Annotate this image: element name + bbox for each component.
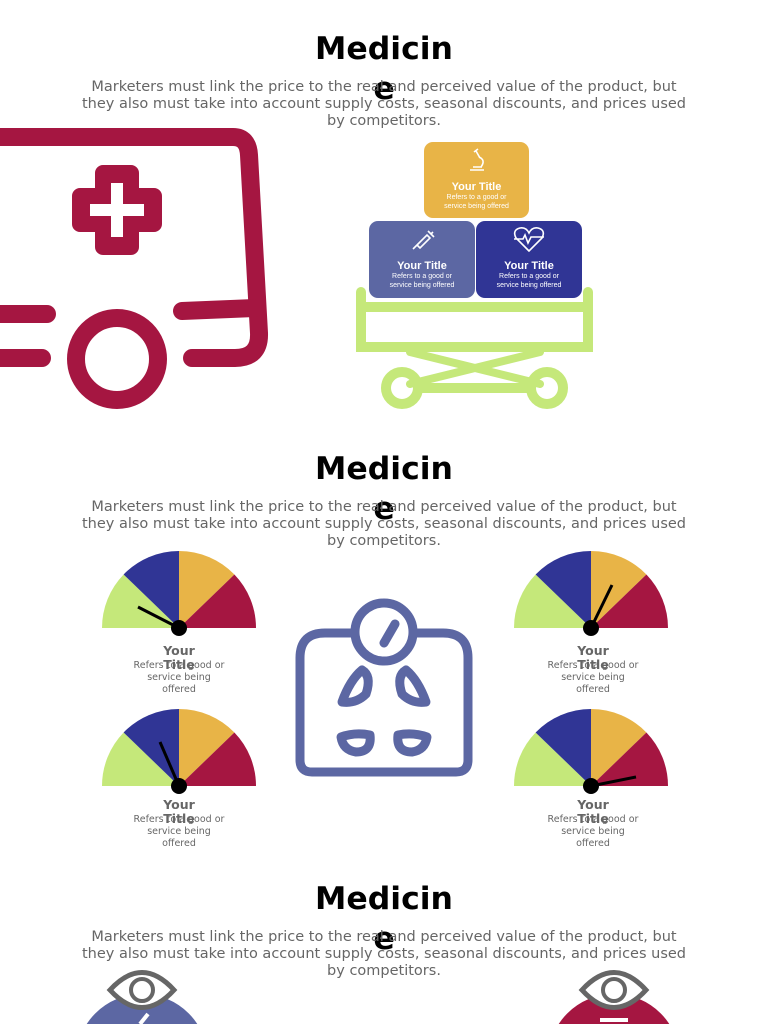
- gauge label 1: [134, 643, 224, 695]
- gauge label 2: [548, 643, 638, 695]
- title 1: [315, 31, 453, 107]
- paragraph 1: Marketers must link the price to the real and perceived value of the product, but they also must take into account supply costs, seasonal discounts, and prices used by competitors.: [82, 79, 686, 129]
- card: microscope: Refers to a good or: [447, 194, 506, 201]
- paragraph 2: Marketers must link the price to the real and perceived value of the product, but they also must take into account supply costs, seasonal discounts, and prices used by competitors.: [82, 499, 686, 549]
- gauge label 2: Refers to a good or: [548, 660, 638, 671]
- gauge label 4: Title: [577, 811, 609, 826]
- card: heart: service being offered: [497, 282, 561, 289]
- card: syringe: Refers to a good or: [392, 273, 452, 280]
- card: syringe: Your Title: [397, 260, 447, 272]
- icon: weighing scale: [300, 603, 468, 772]
- title 2: e: [373, 491, 395, 527]
- gauge label 1: service being: [147, 672, 211, 683]
- paragraph 3: Marketers must link the price to the real and perceived value of the product, but they also must take into account supply costs, seasonal discounts, and prices used by competitors.: [82, 929, 686, 979]
- title 2: Medicin: [315, 451, 453, 487]
- gauge label 2: Your: [577, 643, 609, 658]
- icon: stretcher: [361, 292, 588, 404]
- card: heart: [476, 221, 582, 298]
- card: microscope: Your Title: [452, 181, 501, 193]
- gauge 2: [514, 551, 668, 636]
- bottom right circle with eye: [548, 972, 680, 1024]
- card: heart: Your Title: [504, 260, 554, 272]
- title 3: [315, 881, 453, 957]
- gauge label 1: Title: [163, 657, 195, 672]
- gauge 3: [102, 709, 256, 794]
- gauge label 1: Refers to a good or: [134, 660, 224, 671]
- gauge label 1: Your: [163, 643, 195, 658]
- gauge label 3: offered: [162, 838, 196, 849]
- gauge label 4: service being: [561, 826, 625, 837]
- card: microscope: service being offered: [444, 203, 509, 210]
- gauge label 4: [548, 797, 638, 849]
- gauge label 3: Refers to a good or: [134, 814, 224, 825]
- card: syringe: [369, 221, 475, 298]
- gauge 1: [102, 551, 256, 636]
- gauge label 3: Your: [163, 797, 195, 812]
- title 2: [315, 451, 453, 527]
- gauge label 2: Title: [577, 657, 609, 672]
- title 1: Medicin: [315, 31, 453, 67]
- gauge label 4: Your: [577, 797, 609, 812]
- title 3: e: [373, 921, 395, 957]
- gauge label 1: offered: [162, 684, 196, 695]
- gauge label 2: service being: [561, 672, 625, 683]
- title 3: Medicin: [315, 881, 453, 917]
- gauge label 3: [134, 797, 224, 849]
- gauge label 3: Title: [163, 811, 195, 826]
- bottom left circle with eye: [76, 972, 208, 1024]
- gauge 4: [514, 709, 668, 794]
- title 1: e: [373, 71, 395, 107]
- card: heart: Refers to a good or: [499, 273, 559, 280]
- card: syringe: service being offered: [390, 282, 454, 289]
- gauge label 2: offered: [576, 684, 610, 695]
- icon: ambulance: [0, 137, 259, 400]
- card: microscope: [424, 142, 529, 218]
- gauge label 4: offered: [576, 838, 610, 849]
- gauge label 4: Refers to a good or: [548, 814, 638, 825]
- gauge label 3: service being: [147, 826, 211, 837]
